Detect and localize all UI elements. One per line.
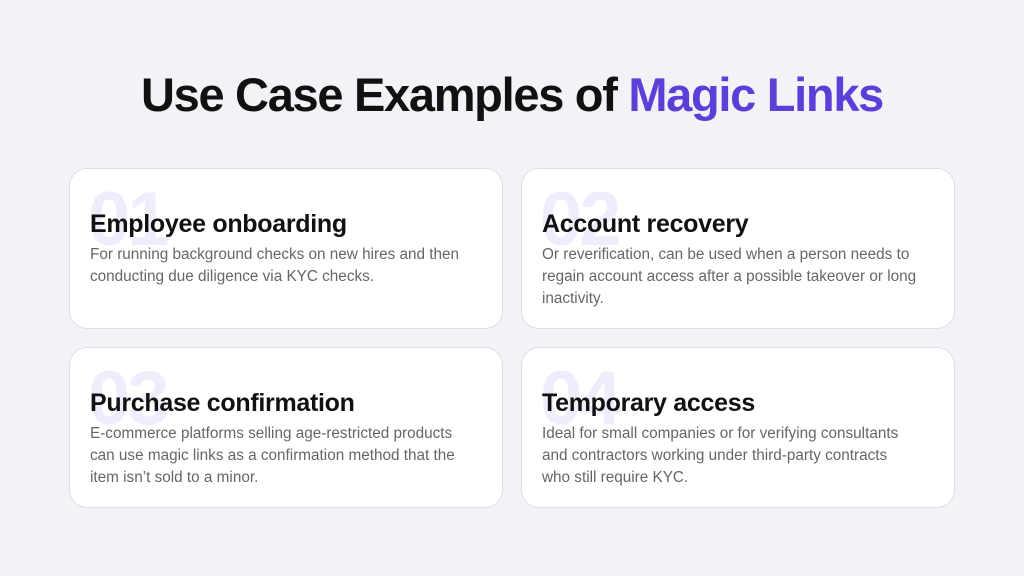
heading: Temporary access bbox=[542, 389, 755, 417]
text: who still require KYC. bbox=[542, 469, 688, 486]
panel: purchase confirmation bbox=[69, 347, 503, 508]
title: Use Case Examples of Magic Links bbox=[141, 68, 883, 121]
text bbox=[542, 425, 898, 486]
number 03: 03 bbox=[88, 356, 167, 441]
heading: Account recovery bbox=[542, 210, 748, 238]
text: can use magic links as a confirmation method that the bbox=[90, 447, 455, 464]
text: Or reverification, can be used when a person needs to bbox=[542, 246, 909, 263]
panel: account recovery bbox=[521, 168, 955, 329]
text bbox=[90, 246, 459, 285]
text bbox=[542, 246, 916, 307]
text: E-commerce platforms selling age-restricted products bbox=[90, 425, 452, 442]
text: regain account access after a possible takeover or long bbox=[542, 268, 916, 285]
text: Ideal for small companies or for verifying consultants bbox=[542, 425, 898, 442]
text bbox=[90, 425, 455, 486]
panel: employee onboarding bbox=[69, 168, 503, 329]
number 04: 04 bbox=[540, 356, 619, 441]
text: and contractors working under third-party contracts bbox=[542, 447, 887, 464]
text: inactivity. bbox=[542, 290, 604, 307]
heading: Purchase confirmation bbox=[90, 389, 355, 417]
panel: temporary access bbox=[521, 347, 955, 508]
text: conducting due diligence via KYC checks. bbox=[90, 268, 374, 285]
heading: Employee onboarding bbox=[90, 210, 347, 238]
text: For running background checks on new hires and then bbox=[90, 246, 459, 263]
text: item isn’t sold to a minor. bbox=[90, 469, 258, 486]
number 01: 01 bbox=[88, 177, 167, 262]
number 02: 02 bbox=[540, 177, 619, 262]
